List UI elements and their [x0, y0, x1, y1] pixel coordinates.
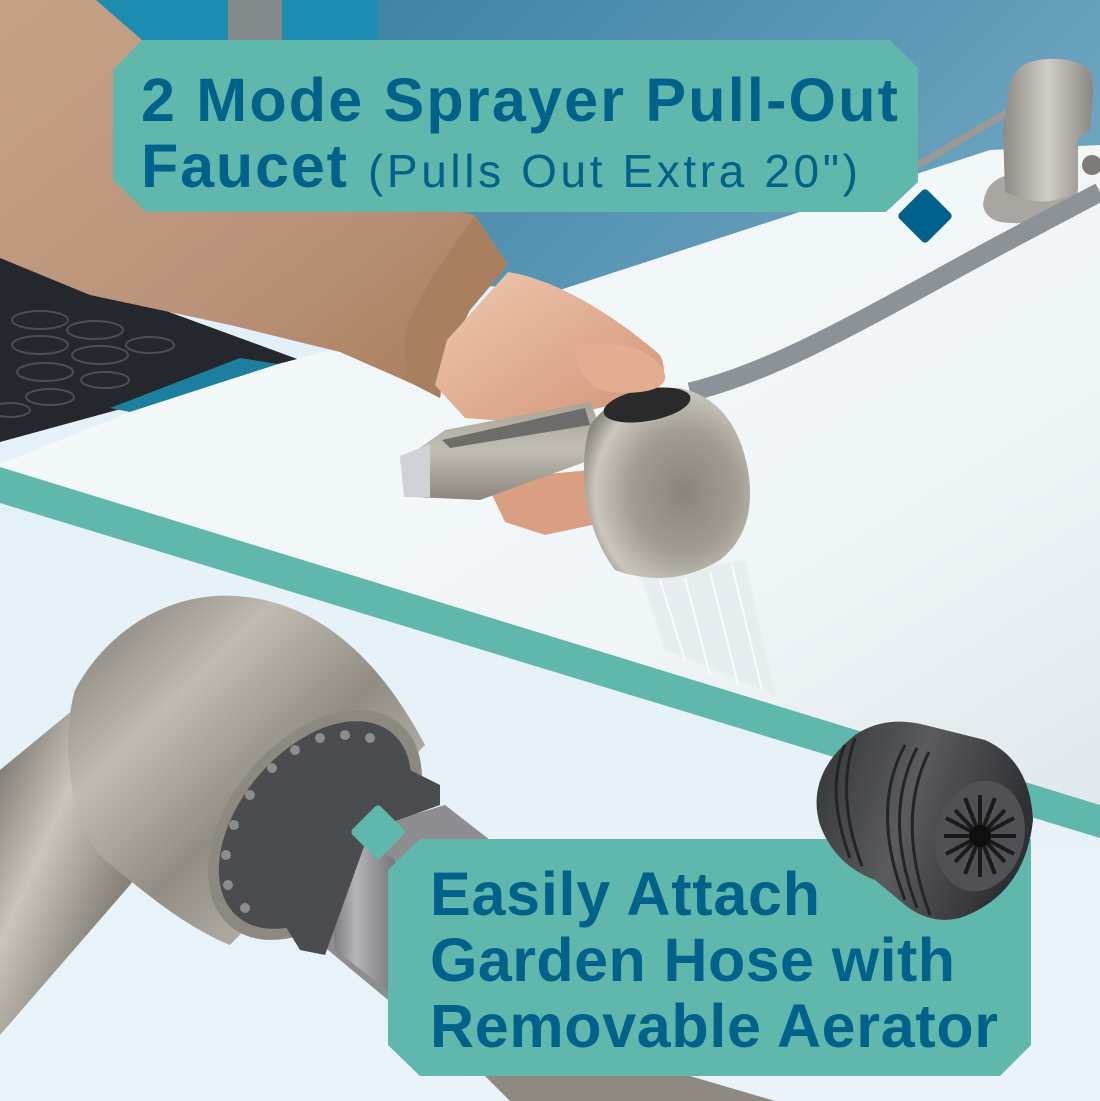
aerator spokes: [944, 795, 1016, 877]
spray button: [601, 382, 693, 428]
sprayer head: [584, 388, 750, 578]
hand: [435, 272, 664, 422]
sprayer hose: [690, 192, 1100, 392]
sprayer head body: [68, 596, 425, 945]
grey hose tube: [322, 805, 490, 1000]
heading line 2: Faucet: [141, 132, 347, 200]
diagonal teal divider band: [0, 467, 1100, 838]
water spray: [640, 560, 775, 695]
hex nut: [255, 755, 440, 955]
aerator centre hole: [969, 825, 991, 847]
spray face ring: [165, 669, 465, 981]
icon: teal diamond marker: [350, 804, 406, 860]
thumb: [575, 343, 665, 393]
dark floor mat: [0, 250, 300, 442]
thread ridges: [836, 738, 930, 915]
soap dispenser: [918, 59, 1100, 223]
sink basin: [0, 145, 1100, 815]
aerator threaded body: [817, 722, 1033, 920]
blue sliver: [110, 358, 278, 412]
sweater cuff: [405, 215, 508, 398]
photo: sink with pull-out sprayer: [0, 0, 1100, 815]
spray nozzles: [221, 730, 375, 913]
heading line 1: Easily Attach: [430, 860, 820, 928]
heading line 3: Removable Aerator: [430, 992, 998, 1060]
sweater arm: [0, 0, 508, 398]
sprayer handle: [400, 402, 610, 500]
heading note: (Pulls Out Extra 20"): [368, 145, 858, 197]
lower pipe: [485, 1076, 775, 1101]
callout: top heading: [113, 40, 918, 212]
wall: [378, 0, 1100, 290]
callout background: [113, 40, 918, 212]
photo: removable aerator: [817, 722, 1037, 920]
heading line 1: 2 Mode Sprayer Pull-Out: [141, 66, 898, 134]
fingers under handle: [485, 470, 592, 535]
dark teal backsplash: [95, 0, 378, 50]
heading line 2: Garden Hose with: [430, 926, 955, 994]
photo: close-up sprayer with aerator removed: [0, 596, 775, 1101]
aerator face: [923, 771, 1037, 901]
icon: navy diamond marker: [897, 188, 953, 244]
sprayer neck: [0, 700, 200, 1035]
pipe behind: [228, 0, 282, 42]
callout: bottom heading: [388, 839, 1031, 1076]
callout background: [388, 839, 1031, 1076]
